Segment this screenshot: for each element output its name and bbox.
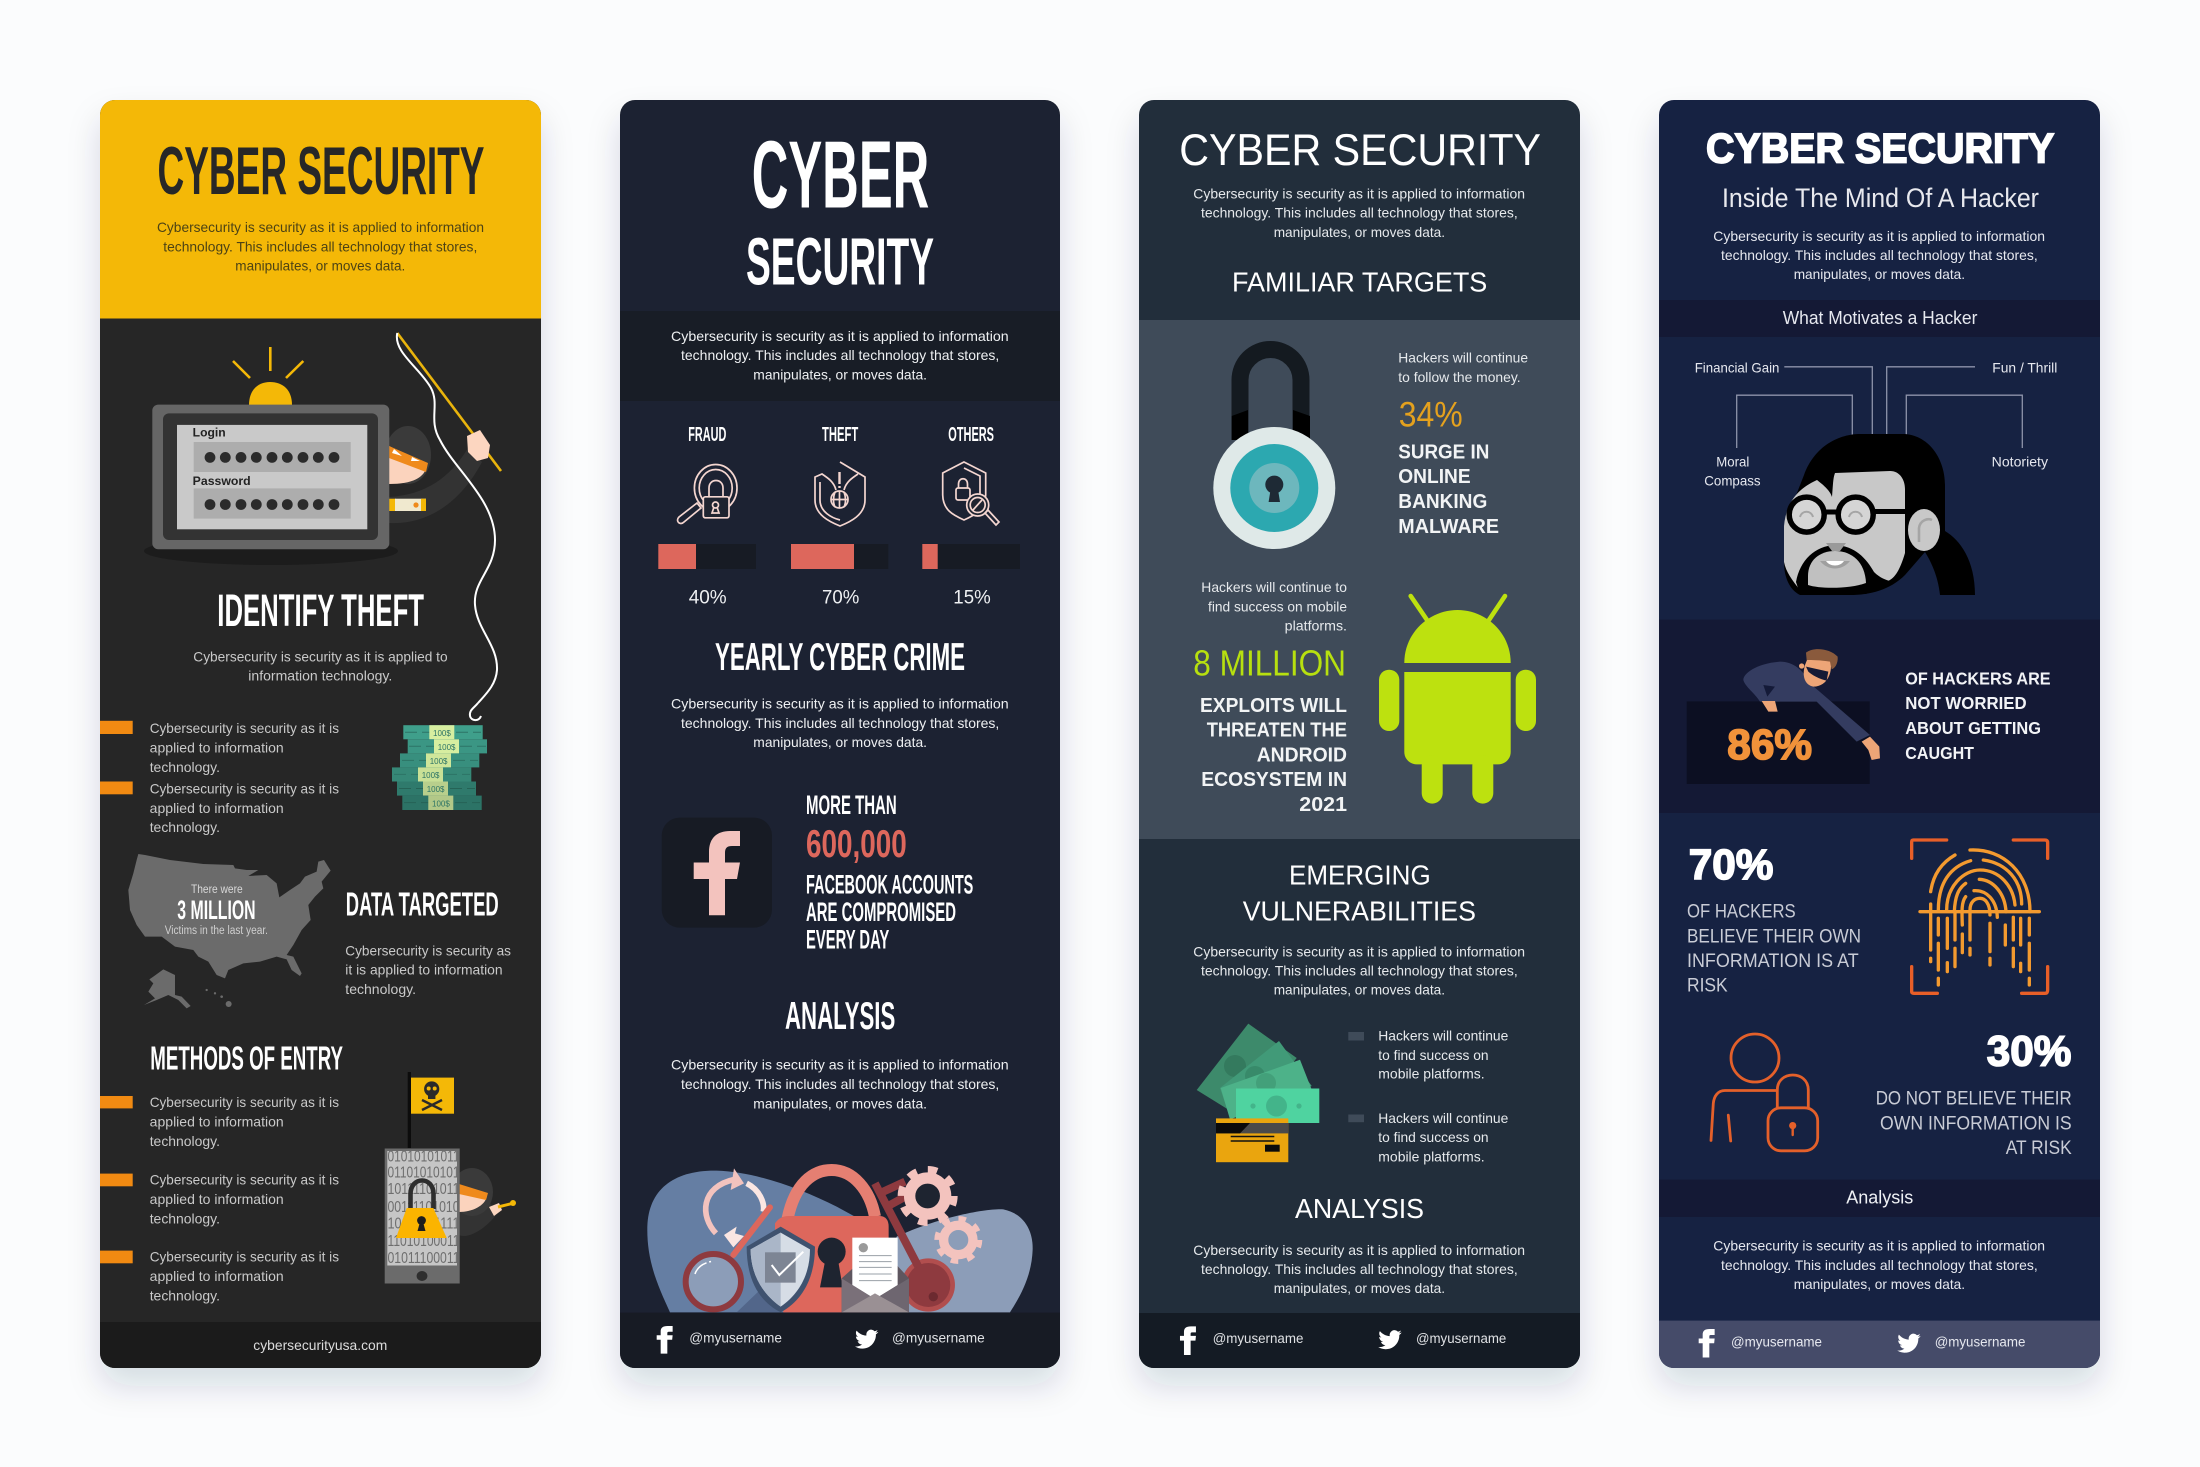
stat: fraud: 40%: [689, 588, 727, 609]
diagram: motivation labels and connector lines: Financial Gain: [1695, 359, 1779, 375]
icon: facebook tile: [662, 818, 772, 928]
footer: website: cybersecurityusa.com: [253, 1337, 387, 1353]
intro text: manipulates, or moves data.: [753, 367, 927, 383]
illustration: login screen and phishing thief: [144, 333, 501, 720]
callout: online banking malware: BANKING: [1398, 491, 1487, 513]
yearly cyber crime text: [671, 696, 1009, 750]
intro text: [671, 328, 1009, 383]
callout: android exploits: EXPLOITS WILL: [1200, 695, 1347, 717]
intro text: Cybersecurity is security as it is applied to information: [671, 328, 1009, 344]
panel: yellow and charcoal infographic: [100, 100, 541, 1368]
bullet list: identity theft: applied to information: [150, 800, 284, 816]
title: [746, 122, 934, 299]
illustration: phone lock, pirate flag and thief: 01101010101: [388, 1164, 460, 1182]
footer: social handles: [1699, 1329, 2025, 1358]
icon: facebook: [1699, 1329, 1715, 1358]
intro text: Cybersecurity is security as it is applied to information: [1713, 228, 2045, 244]
handle: twitter: @myusername: [892, 1330, 985, 1346]
callout: android exploits: 2021: [1299, 794, 1347, 816]
bullet list: mobile platforms: Hackers will continue: [1378, 1110, 1509, 1126]
illustration: login screen and phishing thief: Password: [193, 474, 251, 488]
analysis text: manipulates, or moves data.: [1274, 1280, 1445, 1296]
icon: stack of money: 100$: [422, 771, 440, 780]
icon: stack of money: 100$: [438, 743, 456, 752]
yearly cyber crime text: manipulates, or moves data.: [753, 734, 927, 750]
identify theft text: Cybersecurity is security as it is applied to: [193, 648, 448, 664]
bullet list: methods of entry: applied to information: [150, 1191, 284, 1207]
panel: navy infographic inside the mind of a hacker: [1659, 100, 2100, 1369]
stat: 30 percent: OWN INFORMATION IS: [1880, 1113, 2072, 1134]
bullet list: methods of entry: Cybersecurity is security as it is: [150, 1094, 339, 1110]
heading: familiar targets: FAMILIAR TARGETS: [1232, 266, 1487, 298]
bullet list: identity theft: [100, 720, 339, 835]
bullet list: methods of entry: applied to information: [150, 1114, 284, 1130]
stat: 70 percent: INFORMATION IS AT: [1687, 951, 1859, 972]
heading: methods of entry: METHODS OF ENTRY: [150, 1039, 343, 1076]
icon: twitter: [855, 1330, 878, 1349]
stat: theft: [791, 423, 888, 609]
intro text: technology. This includes all technology that stores,: [1721, 247, 2038, 263]
analysis text: technology. This includes all technology that stores,: [1721, 1257, 2038, 1273]
heading: analysis: ANALYSIS: [785, 995, 895, 1038]
intro text: Cybersecurity is security as it is applied to information: [157, 219, 484, 235]
vulnerabilities text: manipulates, or moves data.: [1274, 982, 1445, 998]
bullet list: methods of entry: Cybersecurity is security as it is: [150, 1249, 339, 1265]
icon: facebook: [1180, 1326, 1196, 1355]
callout: android exploits: ANDROID: [1257, 744, 1347, 766]
diagram: motivation labels and connector lines: [1695, 359, 2057, 489]
bullet list: methods of entry: technology.: [150, 1210, 220, 1226]
icon: padlock: [1213, 349, 1335, 549]
stat: 30 percent: [1876, 1028, 2072, 1159]
stat: 30 percent: AT RISK: [2006, 1138, 2072, 1159]
stat: 70 percent: BELIEVE THEIR OWN: [1687, 926, 1861, 948]
illustration: login screen and phishing thief: Login: [193, 426, 226, 440]
facebook statistic: [806, 790, 973, 954]
icon: twitter: [1897, 1334, 1921, 1353]
callout: online banking malware: Hackers will continue: [1398, 350, 1528, 366]
panel: slate infographic with familiar targets: [1139, 100, 1580, 1369]
analysis text: manipulates, or moves data.: [753, 1095, 927, 1111]
stat: theft: THEFT: [822, 423, 859, 446]
intro text: technology. This includes all technology that stores,: [681, 347, 999, 363]
icon: stack of money: 100$: [430, 757, 448, 766]
analysis text: [1193, 1242, 1525, 1296]
icon: stack of money: 100$: [427, 785, 445, 794]
title: SECURITY: [746, 225, 934, 299]
callout: online banking malware: ONLINE: [1398, 466, 1471, 488]
illustration: phone lock, pirate flag and thief: 00111101010: [388, 1199, 460, 1216]
map: united states: [128, 854, 331, 1008]
vulnerabilities text: Cybersecurity is security as it is applied to information: [1193, 943, 1525, 959]
callout: 86 percent: NOT WORRIED: [1905, 693, 2027, 713]
vulnerabilities text: technology. This includes all technology that stores,: [1201, 962, 1518, 978]
facebook statistic: EVERY DAY: [806, 924, 889, 954]
icon: cash and credit card: [1197, 1024, 1319, 1162]
illustration: phone lock, pirate flag and thief: 01011100011: [388, 1250, 460, 1267]
handle: facebook: @myusername: [689, 1330, 782, 1346]
facebook statistic: MORE THAN: [806, 790, 897, 820]
bullet list: methods of entry: technology.: [150, 1287, 220, 1303]
handle: facebook: @myusername: [1213, 1331, 1303, 1346]
diagram: motivation labels and connector lines: Notoriety: [1992, 453, 2048, 469]
title: CYBER SECURITY: [1706, 124, 2054, 172]
callout: android exploits: Hackers will continue to: [1201, 579, 1347, 595]
identify theft text: information technology.: [248, 668, 392, 684]
illustration: phone lock, pirate flag and thief: 10111101111: [388, 1216, 460, 1233]
callout: online banking malware: to follow the money.: [1398, 369, 1521, 385]
callout: online banking malware: MALWARE: [1398, 516, 1499, 538]
title: CYBER: [752, 122, 929, 228]
intro text: Cybersecurity is security as it is applied to information: [1193, 186, 1525, 202]
illustration: phone lock, pirate flag and thief: 01010101011: [388, 1149, 460, 1166]
callout: 86 percent: OF HACKERS ARE: [1905, 668, 2051, 688]
stat: fraud: FRAUD: [688, 423, 726, 446]
bullet list: identity theft: technology.: [150, 819, 220, 835]
data targeted text: it is applied to information: [345, 962, 503, 978]
callout: android exploits: platforms.: [1285, 618, 1347, 634]
callout: 86 percent: ABOUT GETTING: [1905, 718, 2041, 738]
stat: others: OTHERS: [948, 423, 994, 446]
intro text: [1713, 228, 2045, 282]
stat: 70 percent: 70%: [1689, 841, 1773, 889]
illustration: padlock, key, gears, shield and magnifier: [647, 1168, 1033, 1312]
identify theft text: [193, 648, 448, 684]
stat: fraud: [658, 423, 756, 609]
icon: person with padlock: [1711, 1034, 1818, 1151]
stat: theft: 70%: [822, 588, 859, 609]
data targeted text: [345, 942, 511, 997]
icon: facebook: [657, 1326, 673, 1354]
bullet list: mobile platforms: mobile platforms.: [1378, 1065, 1485, 1081]
bullet list: mobile platforms: to find success on: [1378, 1129, 1489, 1145]
map: united states: There were: [191, 882, 243, 896]
vulnerabilities text: [1193, 943, 1525, 998]
handle: facebook: @myusername: [1731, 1334, 1822, 1350]
heading: identify theft: IDENTIFY THEFT: [217, 585, 424, 636]
intro text: manipulates, or moves data.: [235, 258, 405, 274]
bullet list: methods of entry: [100, 1094, 339, 1303]
heading: analysis: Analysis: [1846, 1187, 1913, 1207]
stat: 70 percent: RISK: [1687, 976, 1728, 997]
icon: hacker face: [1784, 434, 1975, 595]
title: CYBER SECURITY: [158, 134, 484, 209]
icon: fingerprint scan: [1912, 840, 2048, 993]
bullet list: identity theft: applied to information: [150, 740, 284, 756]
callout: android exploits: find success on mobile: [1208, 598, 1347, 614]
stat: 70 percent: [1687, 841, 1861, 997]
diagram: motivation labels and connector lines: Fun / Thrill: [1992, 359, 2057, 375]
bullet list: methods of entry: technology.: [150, 1133, 220, 1149]
yearly cyber crime text: technology. This includes all technology that stores,: [681, 715, 999, 731]
callout: 86 percent: CAUGHT: [1905, 743, 1974, 763]
callout: android exploits: ECOSYSTEM IN: [1201, 769, 1347, 791]
intro text: [157, 219, 484, 274]
bullet list: mobile platforms: Hackers will continue: [1378, 1028, 1509, 1044]
title: CYBER SECURITY: [1179, 126, 1541, 175]
heading: emerging vulnerabilities: [1243, 859, 1476, 926]
stat: others: 15%: [953, 588, 991, 609]
callout: online banking malware: 34%: [1399, 395, 1463, 434]
analysis text: Cybersecurity is security as it is applied to information: [1713, 1238, 2045, 1254]
callout: android exploits: [1193, 579, 1347, 816]
analysis text: Cybersecurity is security as it is applied to information: [671, 1057, 1009, 1073]
data targeted text: technology.: [345, 981, 416, 997]
analysis text: [671, 1057, 1009, 1111]
bullet list: identity theft: Cybersecurity is security as it is: [150, 780, 339, 796]
intro text: technology. This includes all technology that stores,: [163, 238, 477, 254]
bullet list: identity theft: technology.: [150, 759, 220, 775]
intro text: technology. This includes all technology that stores,: [1201, 205, 1518, 221]
diagram: motivation labels and connector lines: Compass: [1704, 473, 1761, 489]
bullet list: methods of entry: Cybersecurity is security as it is: [150, 1172, 339, 1188]
illustration: phone lock, pirate flag and thief: [385, 1072, 516, 1284]
yearly cyber crime text: Cybersecurity is security as it is applied to information: [671, 696, 1009, 712]
callout: online banking malware: SURGE IN: [1398, 441, 1489, 463]
facebook statistic: ARE COMPROMISED: [806, 897, 956, 927]
stat: 70 percent: OF HACKERS: [1687, 902, 1796, 923]
icon: stack of money: 100$: [432, 800, 450, 808]
footer: social handles: [657, 1326, 985, 1354]
illustration: phone lock, pirate flag and thief: 11010100011: [388, 1233, 460, 1250]
heading: what motivates a hacker: What Motivates a Hacker: [1783, 308, 1977, 328]
analysis text: technology. This includes all technology that stores,: [681, 1076, 999, 1092]
diagram: motivation labels and connector lines: Moral: [1716, 453, 1749, 469]
bullet list: identity theft: Cybersecurity is security as it is: [150, 720, 339, 736]
analysis text: manipulates, or moves data.: [1794, 1276, 1965, 1292]
bullet list: mobile platforms: to find success on: [1378, 1047, 1489, 1063]
heading: yearly cyber crime: YEARLY CYBER CRIME: [715, 636, 965, 679]
intro text: manipulates, or moves data.: [1794, 266, 1965, 282]
callout: android exploits: 8 MILLION: [1193, 642, 1346, 683]
callout: android exploits: THREATEN THE: [1207, 720, 1347, 742]
analysis text: [1713, 1238, 2045, 1292]
heading: data targeted: DATA TARGETED: [346, 885, 499, 922]
facebook statistic: 600,000: [806, 823, 907, 866]
heading: analysis: ANALYSIS: [1295, 1193, 1424, 1224]
handle: twitter: @myusername: [1935, 1334, 2025, 1350]
footer: social handles: [1180, 1326, 1506, 1355]
intro text: [1193, 186, 1525, 240]
icon: twitter: [1378, 1330, 1402, 1349]
heading: emerging vulnerabilities: EMERGING: [1289, 859, 1431, 890]
facebook statistic: FACEBOOK ACCOUNTS: [806, 869, 973, 899]
heading: emerging vulnerabilities: VULNERABILITIES: [1243, 896, 1476, 926]
icon: stack of money: [392, 725, 487, 810]
data targeted text: Cybersecurity is security as: [345, 942, 511, 958]
analysis text: technology. This includes all technology that stores,: [1201, 1261, 1518, 1277]
stat: others: [922, 423, 1020, 609]
intro text: manipulates, or moves data.: [1274, 224, 1445, 240]
bullet list: mobile platforms: mobile platforms.: [1378, 1148, 1485, 1164]
map: united states: 3 MILLION: [177, 895, 256, 925]
callout: online banking malware: [1398, 350, 1528, 538]
subtitle: Inside The Mind Of A Hacker: [1722, 183, 2039, 213]
icon: android robot: [1379, 596, 1536, 804]
analysis text: Cybersecurity is security as it is applied to information: [1193, 1242, 1525, 1258]
panel: dark navy infographic with coral accents: [620, 100, 1060, 1369]
handle: twitter: @myusername: [1416, 1331, 1506, 1346]
bullet list: methods of entry: applied to information: [150, 1268, 284, 1284]
map: united states: Victims in the last year.: [165, 925, 268, 937]
bullet list: mobile platforms: [1348, 1028, 1509, 1164]
icon: stack of money: 100$: [433, 729, 451, 738]
stat: 30 percent: DO NOT BELIEVE THEIR: [1876, 1088, 2072, 1110]
callout: 86 percent: [1687, 649, 2051, 784]
callout: 86 percent: 86%: [1727, 721, 1812, 769]
illustration: phone lock, pirate flag and thief: 10111101011: [388, 1181, 460, 1198]
stat: 30 percent: 30%: [1987, 1028, 2071, 1076]
